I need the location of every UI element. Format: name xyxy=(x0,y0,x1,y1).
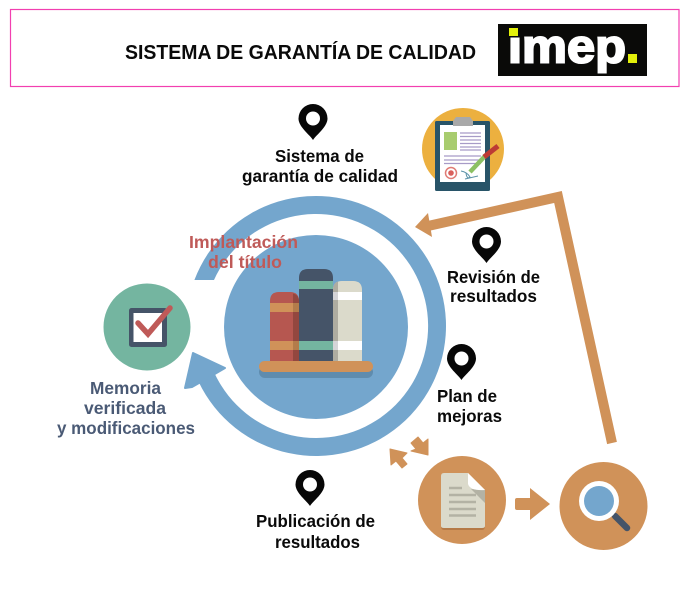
icon: dark book xyxy=(299,269,333,361)
step: Plan de mejoras: Plan de xyxy=(437,386,497,406)
step: Revisión de resultados xyxy=(447,227,540,306)
icon: shelf xyxy=(259,361,373,378)
arrow: document to magnifier xyxy=(515,488,550,520)
heading: Memoria verificada y modificaciones: verificada xyxy=(84,398,166,418)
icon: red book xyxy=(270,292,299,361)
icon: checkbox circle xyxy=(104,284,190,370)
heading: Memoria verificada y modificaciones: Memoria xyxy=(90,378,161,398)
step: Sistema de garantía de calidad: garantía de calidad xyxy=(242,166,398,186)
icon: magnifier circle xyxy=(560,462,648,550)
step: Sistema de garantía de calidad xyxy=(242,104,398,186)
arrows: small double orange arrows xyxy=(390,437,428,468)
step: Plan de mejoras xyxy=(437,344,502,426)
icon: document circle xyxy=(418,456,506,544)
arrow: large orange feedback arrow xyxy=(415,197,612,443)
logo: imep xyxy=(498,20,647,76)
heading: Implantación del título: del título xyxy=(208,252,282,272)
step: Revisión de resultados: Revisión de xyxy=(447,267,540,287)
step: Plan de mejoras: mejoras xyxy=(437,406,502,426)
circular arrow ring xyxy=(185,196,446,456)
heading: Implantación del título xyxy=(189,232,298,272)
central circle with books xyxy=(224,235,408,419)
icon: clipboard xyxy=(422,108,504,191)
icon: cream book xyxy=(333,281,362,361)
heading: Memoria verificada y modificaciones: y modificaciones xyxy=(57,418,195,438)
heading: Implantación del título: Implantación xyxy=(189,232,298,252)
header panel xyxy=(10,10,679,86)
step: Publicación de resultados xyxy=(256,470,375,552)
title: SISTEMA DE GARANTÍA DE CALIDAD xyxy=(125,41,476,64)
step: Revisión de resultados: resultados xyxy=(450,286,537,306)
logo: imep: imep xyxy=(508,20,626,72)
step: Publicación de resultados: Publicación de xyxy=(256,511,375,531)
heading: Memoria verificada y modificaciones xyxy=(57,378,195,438)
step: Publicación de resultados: resultados xyxy=(275,532,360,552)
step: Sistema de garantía de calidad: Sistema de xyxy=(275,146,364,166)
